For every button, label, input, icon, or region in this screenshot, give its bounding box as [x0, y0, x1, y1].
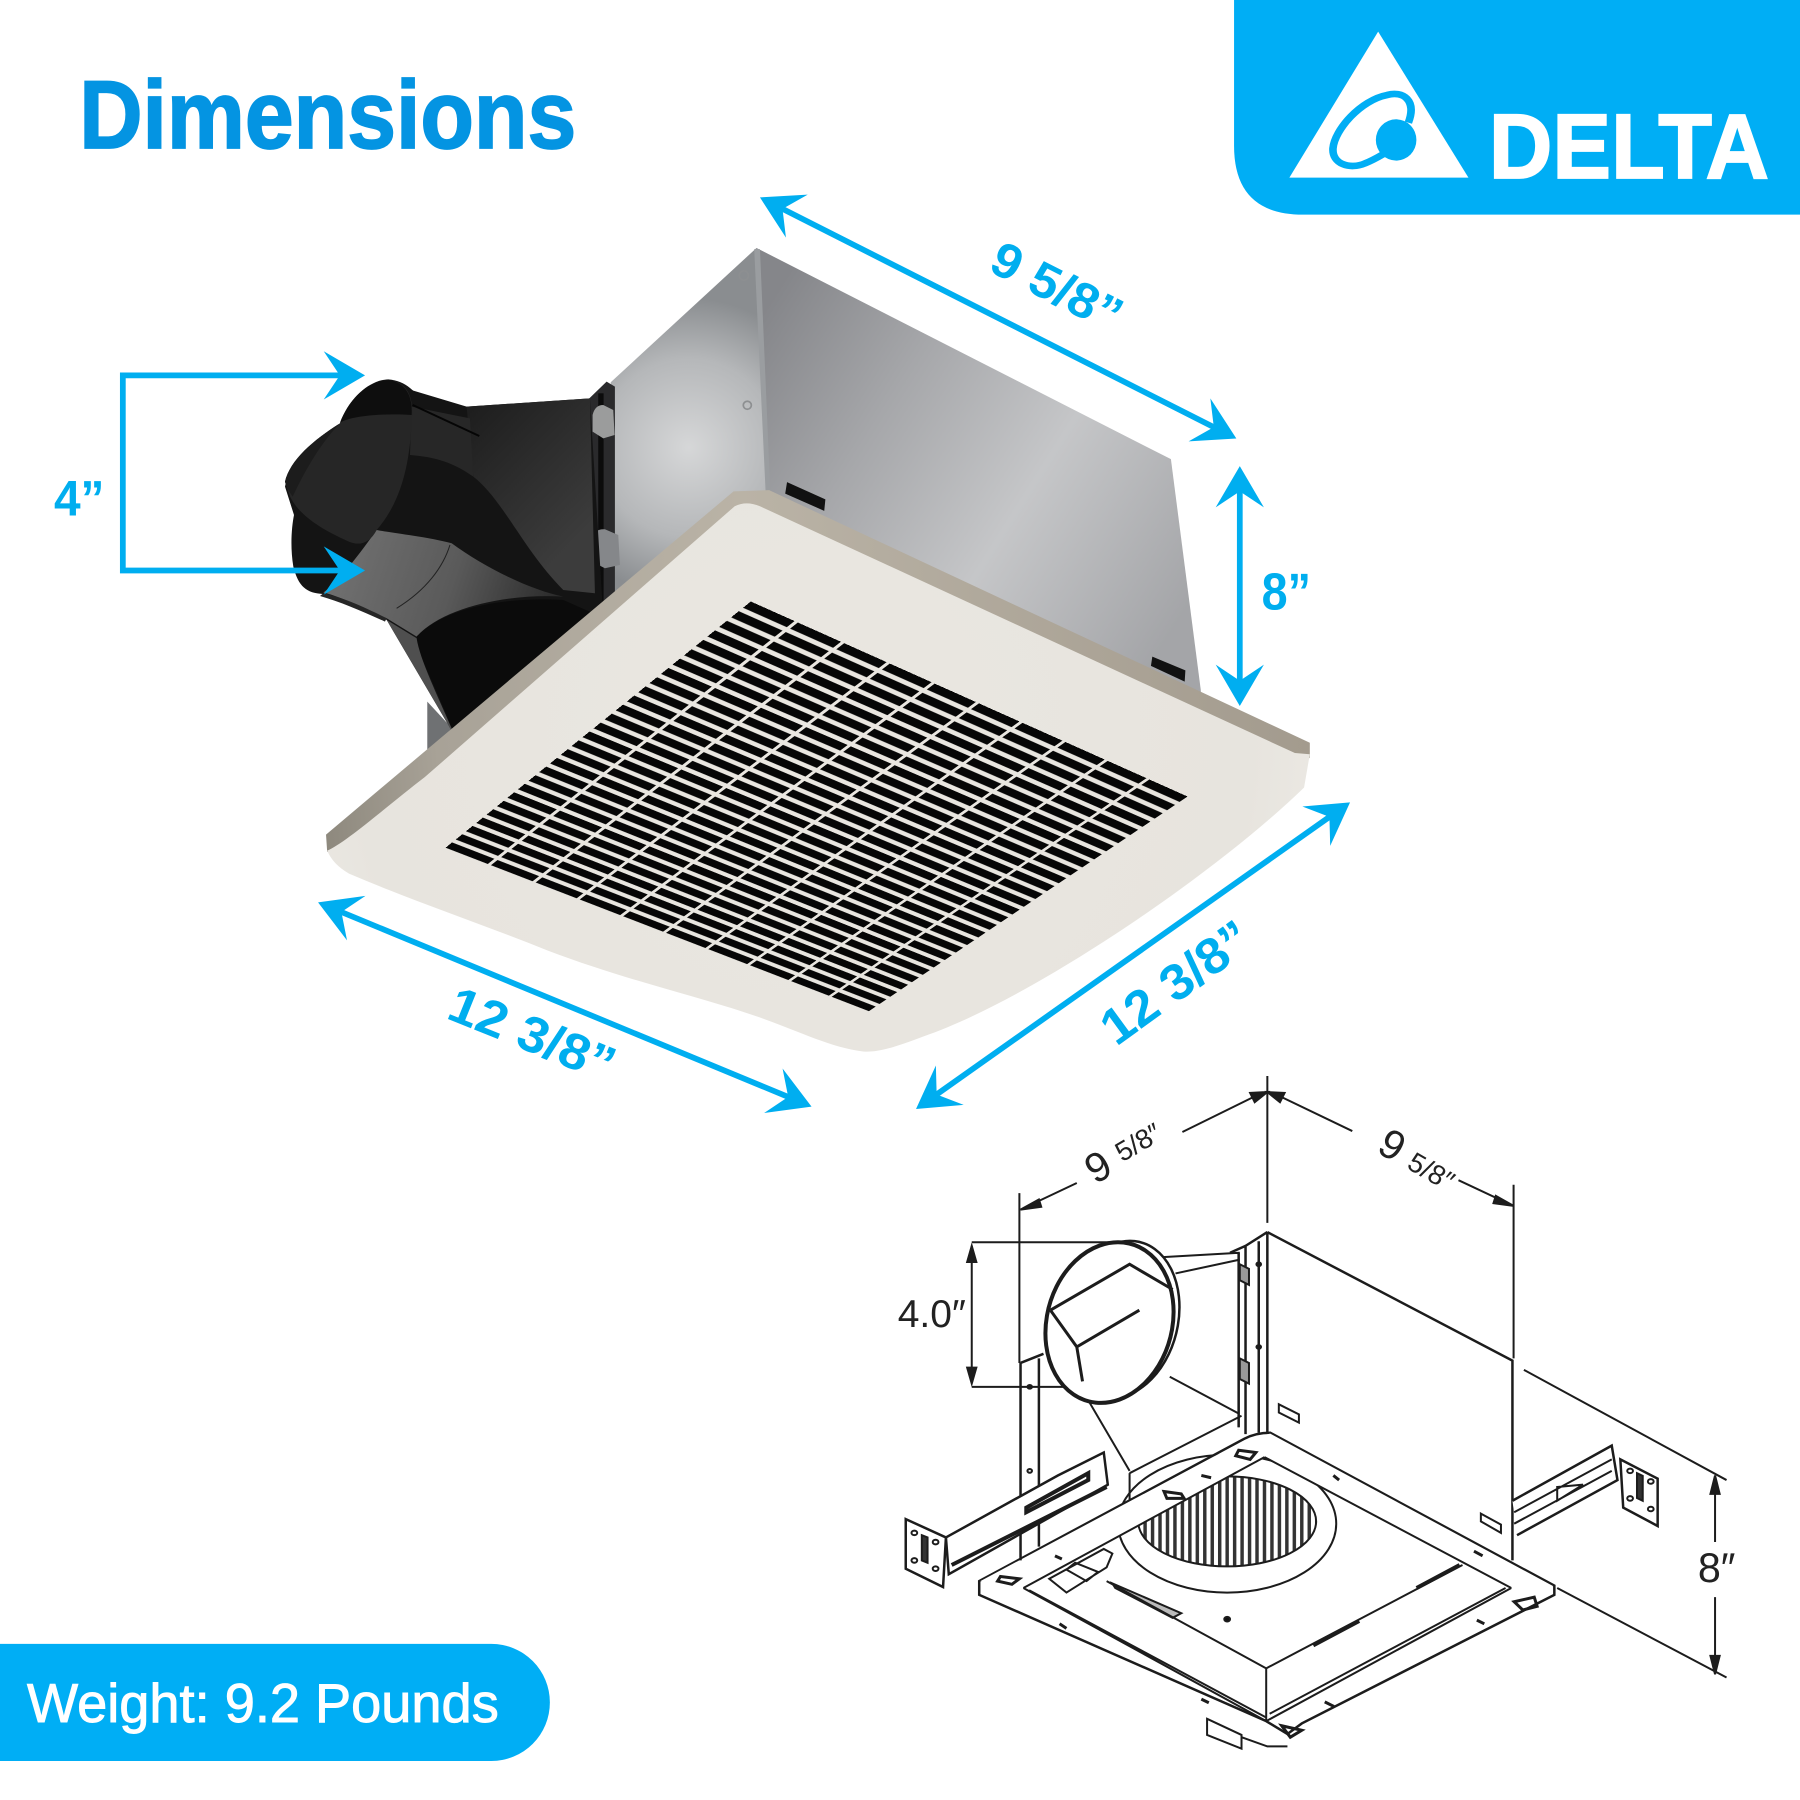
drawing label: 9 5/8 right: 9 — [1371, 1119, 1414, 1171]
mounting plate — [979, 1433, 1554, 1734]
logo wordmark: DELTA — [1489, 96, 1769, 198]
damper cap — [285, 380, 412, 544]
drawing label: 9 5/8 left: 5/8″ — [1110, 1117, 1167, 1168]
housing — [611, 248, 1203, 746]
panel rim — [326, 490, 1310, 855]
drawing label: 8: 8″ — [1698, 1545, 1735, 1591]
blower — [1049, 1455, 1336, 1621]
dimension lines — [967, 1076, 1727, 1678]
grille slots — [446, 602, 1188, 1012]
drawing label: 9 5/8 right: 5/8″ — [1403, 1146, 1460, 1197]
duct — [285, 379, 620, 752]
arrow: 12 3/8 right — [929, 812, 1337, 1100]
fan photo — [285, 248, 1310, 1052]
drawing label: 9 5/8 left: 9 — [1077, 1141, 1120, 1192]
line drawing — [898, 1076, 1735, 1749]
label: 9 5/8: 9 5/8” — [982, 231, 1132, 344]
label: 4: 4” — [54, 469, 104, 526]
hanging tab and plate details — [998, 1450, 1537, 1749]
logo banner — [1234, 0, 1800, 215]
drawing geometry — [906, 1076, 1727, 1749]
weight pill — [0, 1644, 550, 1761]
label: 12 3/8 left: 12 3/8” — [441, 975, 624, 1093]
arrow: 4 inch bracket — [123, 375, 349, 571]
duct drawing — [1033, 1235, 1242, 1501]
weight text: Weight: 9.2 Pounds — [27, 1672, 499, 1734]
arrow: 9 5/8 depth — [774, 205, 1222, 431]
drawing label: 4.0: 4.0″ — [898, 1293, 966, 1336]
label: 12 3/8 right: 12 3/8” — [1089, 909, 1262, 1056]
plate band — [980, 1434, 1553, 1721]
panel face — [327, 503, 1310, 1052]
box — [1230, 1232, 1512, 1560]
arrow: 12 3/8 left — [333, 908, 797, 1100]
flange — [588, 382, 620, 623]
right bracket — [1512, 1446, 1658, 1535]
arrow: 8 height — [1237, 482, 1242, 690]
left strip and bracket — [906, 1354, 1108, 1587]
title: Dimensions — [79, 62, 576, 169]
label: 8: 8” — [1262, 563, 1311, 621]
icon: delta triangle — [1289, 32, 1468, 178]
